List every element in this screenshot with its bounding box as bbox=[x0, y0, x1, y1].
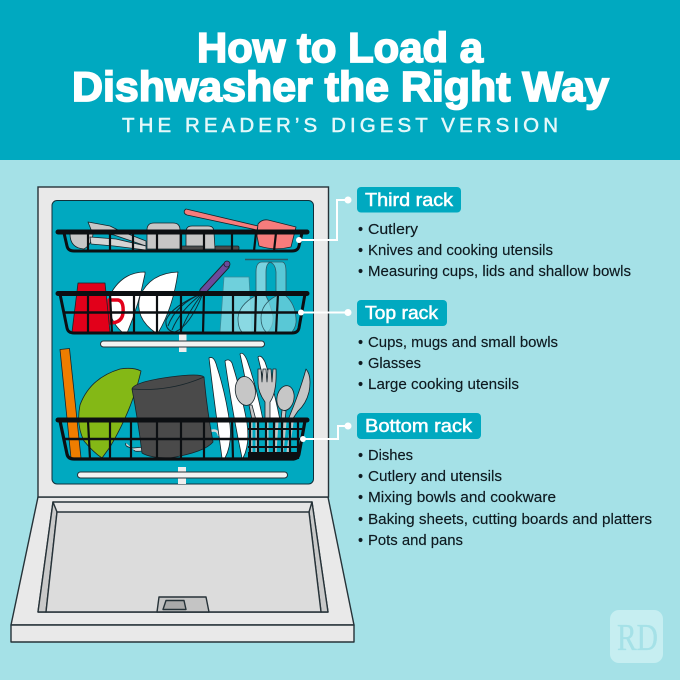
list: Pots and pans bbox=[368, 533, 463, 549]
callout: bottom rack bbox=[300, 413, 652, 549]
glass tumbler bbox=[220, 277, 252, 332]
list: • bbox=[358, 448, 363, 464]
interior panel bbox=[52, 200, 314, 484]
list bbox=[358, 448, 652, 549]
title bbox=[72, 24, 610, 110]
bottom rack basket bbox=[58, 420, 307, 459]
label pill bbox=[357, 300, 447, 326]
list: • bbox=[358, 222, 363, 238]
connector bbox=[300, 422, 352, 442]
lids bbox=[181, 246, 204, 250]
title: How to Load a bbox=[197, 24, 484, 71]
measuring cups bbox=[147, 223, 180, 249]
top rack contents bbox=[72, 260, 296, 333]
door bbox=[11, 497, 354, 642]
white plates bbox=[109, 272, 145, 333]
whisk bbox=[166, 261, 230, 332]
list: • bbox=[358, 377, 363, 393]
list: • bbox=[358, 533, 363, 549]
list: • bbox=[358, 335, 363, 351]
RD logo bbox=[610, 610, 663, 663]
list bbox=[358, 335, 558, 393]
cabinet frame bbox=[38, 187, 328, 497]
third rack basket bbox=[58, 232, 307, 251]
list: Large cooking utensils bbox=[368, 377, 519, 393]
spatula bbox=[184, 209, 258, 230]
callout: third rack: Third rack bbox=[365, 190, 454, 210]
list: Knives and cooking utensils bbox=[368, 243, 553, 259]
callout: top rack: Top rack bbox=[365, 303, 439, 323]
list: • bbox=[358, 243, 363, 259]
top rack basket bbox=[58, 294, 307, 333]
label pill bbox=[357, 187, 461, 212]
subtitle: THE READER’S DIGEST VERSION bbox=[122, 114, 558, 137]
connector bbox=[296, 196, 352, 243]
list: • bbox=[358, 490, 363, 506]
wine glasses bbox=[238, 260, 296, 332]
callout: top rack bbox=[298, 300, 558, 393]
list: • bbox=[358, 356, 363, 372]
cutlery bbox=[70, 234, 93, 249]
fork bbox=[258, 369, 276, 420]
list: • bbox=[358, 264, 363, 280]
spoon bbox=[233, 375, 257, 407]
list: Dishes bbox=[368, 448, 413, 464]
knife bbox=[288, 369, 310, 420]
list: Glasses bbox=[368, 356, 421, 372]
spray arms bbox=[78, 334, 288, 484]
RD logo: RD bbox=[617, 617, 658, 659]
pot bbox=[132, 375, 213, 458]
cutting board bbox=[60, 348, 81, 458]
plates bbox=[209, 357, 230, 458]
callout: bottom rack: Bottom rack bbox=[365, 416, 473, 436]
list: Cutlery and utensils bbox=[368, 469, 502, 485]
small spoon bbox=[275, 384, 296, 412]
list: Measuring cups, lids and shallow bowls bbox=[368, 264, 631, 280]
red mug bbox=[72, 283, 123, 332]
list bbox=[358, 222, 631, 280]
title: Dishwasher the Right Way bbox=[72, 63, 610, 110]
label pill bbox=[357, 413, 481, 439]
list: • bbox=[358, 512, 363, 528]
list: Baking sheets, cutting boards and platters bbox=[368, 512, 652, 528]
list: Cups, mugs and small bowls bbox=[368, 335, 558, 351]
bottom rack contents bbox=[60, 348, 310, 458]
third rack contents bbox=[70, 209, 296, 250]
list: Mixing bowls and cookware bbox=[368, 490, 556, 506]
list: • bbox=[358, 469, 363, 485]
dishwasher illustration bbox=[11, 187, 354, 642]
list: Cutlery bbox=[368, 222, 419, 238]
header band bbox=[0, 0, 680, 160]
callout: third rack bbox=[296, 187, 631, 280]
connector bbox=[298, 309, 352, 316]
cutlery handles in basket bbox=[251, 422, 292, 452]
green bowl bbox=[79, 368, 141, 458]
pot handles bbox=[126, 443, 145, 451]
